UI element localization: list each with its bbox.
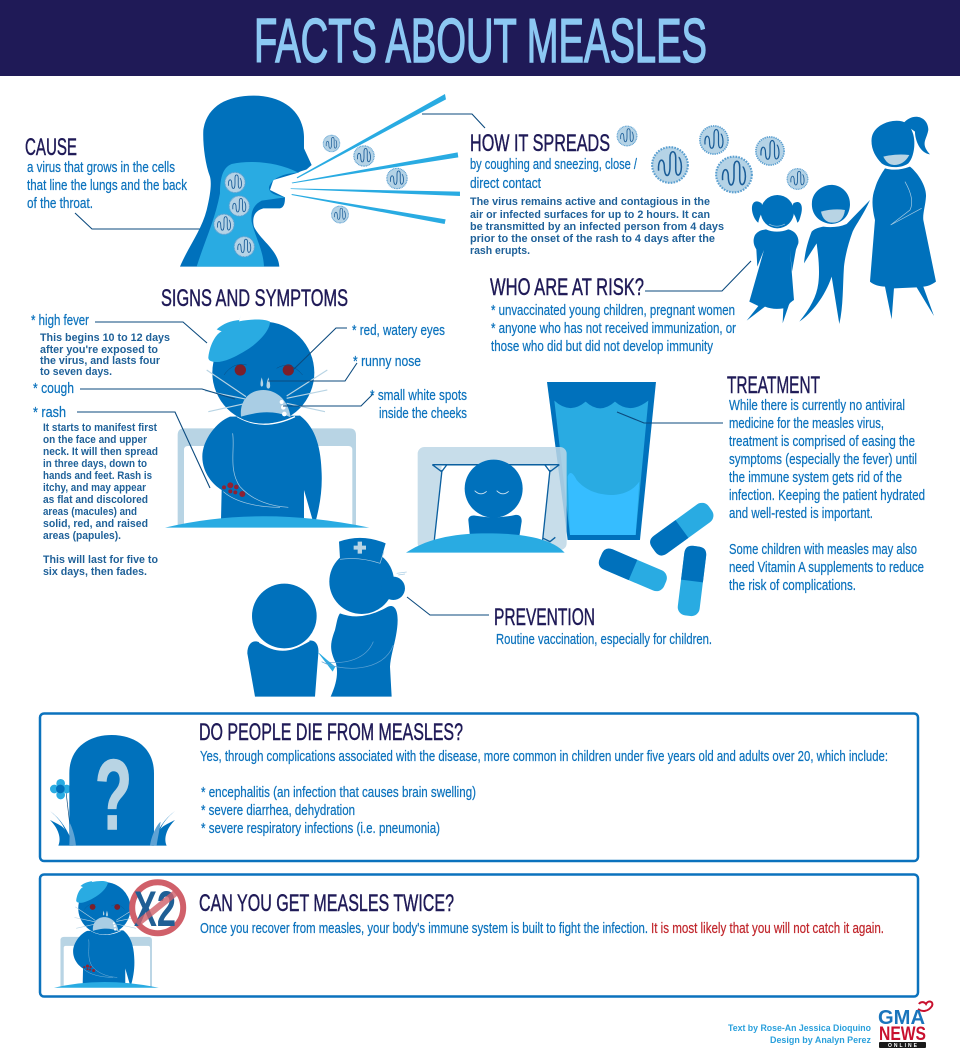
panel: symptom rash: * rash: [33, 404, 66, 421]
panel: how it spreads: [422, 114, 724, 257]
panel: who are at risk: * unvaccinated young children, pregnant women: [491, 302, 735, 319]
panel: symptom rash: areas (papules).: [43, 530, 121, 542]
icon: GMA News Online logo: GMA: [878, 1007, 925, 1029]
icon: treatment glass, patient and pills: [406, 382, 717, 617]
icon: gravestone with question mark: ?: [95, 739, 132, 850]
panel: symptom high fever: the virus, and lasts four: [40, 355, 161, 367]
panel: how it spreads: rash erupts.: [470, 245, 530, 257]
panel: cause: CAUSE: [25, 134, 77, 161]
icon: sick child small: [54, 879, 159, 988]
panel: symptom rash: neck. It will then spread: [43, 446, 158, 458]
icon: coughing head with virus particles: [180, 94, 460, 267]
panel: symptom rash: [33, 404, 210, 578]
credits: Text by Rose-An Jessica Dioquino: [728, 1023, 871, 1034]
icon: pill one: [647, 500, 717, 558]
panel: how it spreads: The virus remains active and contagious in the: [470, 196, 710, 208]
panel: cause: that line the lungs and the back: [27, 177, 187, 194]
panel: treatment: [617, 372, 925, 594]
panel: treatment: the immune system gets rid of the: [729, 469, 902, 486]
icon: child: [247, 584, 318, 697]
icon: nurse vaccinating child: [247, 538, 407, 697]
panel: cause: of the throat.: [27, 195, 93, 212]
panel: how it spreads: HOW IT SPREADS: [470, 130, 610, 157]
panel: prevention: [407, 597, 712, 648]
panel: symptom rash: itchy, and may appear: [43, 482, 147, 494]
panel: cause: a virus that grows in the cells: [27, 159, 175, 176]
panel: treatment: and well-rested is important.: [729, 505, 873, 522]
panel: symptom high fever: [31, 312, 207, 378]
panel: symptom high fever: * high fever: [31, 312, 89, 329]
icon: patient resting in bed: [406, 447, 567, 553]
icon: gravestone with question mark: [50, 735, 175, 850]
panel: how it spreads: prior to the onset of the rash to 4 days after the: [470, 233, 715, 245]
panel: symptom high fever: This begins 10 to 12 days: [40, 332, 170, 344]
panel: how it spreads: air or infected surfaces for up to 2 hours. It can: [470, 209, 710, 221]
icon: GMA News Online logo: [878, 1002, 932, 1049]
icon: sick child in bed: [165, 315, 369, 528]
panel: symptom rash: in three days, down to: [43, 458, 147, 470]
panel: treatment: TREATMENT: [727, 372, 820, 399]
heading: signs and symptoms: SIGNS AND SYMPTOMS: [161, 285, 348, 312]
title banner: [0, 0, 960, 76]
panel: treatment: While there is currently no antiviral: [729, 397, 905, 414]
credits: [728, 1023, 871, 1046]
panel: do people die from measles: [40, 714, 918, 861]
panel: symptom rash: This will last for five to: [43, 554, 158, 566]
icon: glass of water: [547, 382, 656, 540]
icon: pregnant woman: [870, 117, 936, 319]
panel: symptom cough: [33, 380, 235, 399]
panel: symptom rash: hands and feet. Rash is: [43, 470, 152, 482]
icon: boy: [799, 185, 870, 324]
panel: symptom white spots: [283, 387, 467, 422]
panel: how it spreads: by coughing and sneezing, close /: [470, 156, 638, 173]
panel: do people die from measles: * severe respiratory infections (i.e. pneumonia): [201, 820, 440, 837]
panel: who are at risk: * anyone who has not received immunization, or: [491, 320, 736, 337]
panel: symptom red eyes: * red, watery eyes: [352, 322, 445, 339]
panel: symptom rash: on the face and upper: [43, 434, 148, 446]
icon: pill two: [596, 546, 669, 594]
panel: symptom cough: * cough: [33, 380, 74, 397]
panel: do people die from measles: * severe diarrhea, dehydration: [201, 802, 355, 819]
panel: symptom high fever: to seven days.: [40, 366, 112, 378]
panel: can you get measles twice: [40, 874, 918, 996]
panel: symptom red eyes: [293, 322, 445, 370]
panel: can you get measles twice: Once you recover from measles, your body's immune system is built to fight the infection.: [200, 920, 648, 937]
credits: Design by Analyn Perez: [770, 1035, 871, 1046]
panel: prevention: PREVENTION: [494, 604, 595, 631]
icon: airborne virus particles: [617, 126, 808, 192]
panel: symptom rash: six days, then fades.: [43, 566, 147, 578]
panel: cause: [25, 134, 223, 229]
panel: symptom rash: solid, red, and raised: [43, 518, 148, 530]
icon: no second time symbol: X2: [134, 881, 176, 937]
panel: symptom runny nose: [268, 353, 421, 381]
panel: how it spreads: be transmitted by an infected person from 4 days: [470, 221, 724, 233]
panel: symptom rash: areas (macules) and: [43, 506, 137, 518]
panel: prevention: Routine vaccination, especially for children.: [496, 631, 712, 648]
panel: do people die from measles: * encephalitis (an infection that causes brain swelling): [201, 784, 476, 801]
panel: how it spreads: direct contact: [470, 175, 542, 192]
icon: girl, boy and pregnant woman: [747, 117, 936, 324]
panel: do people die from measles: DO PEOPLE DIE FROM MEASLES?: [199, 719, 463, 746]
panel: who are at risk: WHO ARE AT RISK?: [490, 274, 644, 301]
icon: GMA News Online logo: ONLINE: [888, 1043, 918, 1049]
panel: treatment: the risk of complications.: [729, 577, 856, 594]
icon: pill three: [677, 545, 707, 617]
panel: symptom white spots: inside the cheeks: [379, 405, 467, 422]
panel: who are at risk: [490, 261, 751, 355]
panel: symptom runny nose: * runny nose: [353, 353, 421, 370]
panel: can you get measles twice: It is most likely that you will not catch it again.: [651, 920, 884, 937]
panel: symptom rash: It starts to manifest first: [43, 422, 157, 434]
icon: GMA News Online logo: NEWS: [879, 1024, 926, 1045]
panel: who are at risk: those who did but did not develop immunity: [491, 338, 713, 355]
panel: symptom white spots: * small white spots: [370, 387, 467, 404]
icon: nurse: [317, 538, 407, 697]
panel: can you get measles twice: CAN YOU GET MEASLES TWICE?: [199, 890, 454, 917]
panel: symptom high fever: after you're exposed to: [40, 344, 158, 356]
panel: symptom rash: as flat and discolored: [43, 494, 148, 506]
icon: girl: [747, 195, 802, 323]
panel: treatment: medicine for the measles virus,: [729, 415, 884, 432]
